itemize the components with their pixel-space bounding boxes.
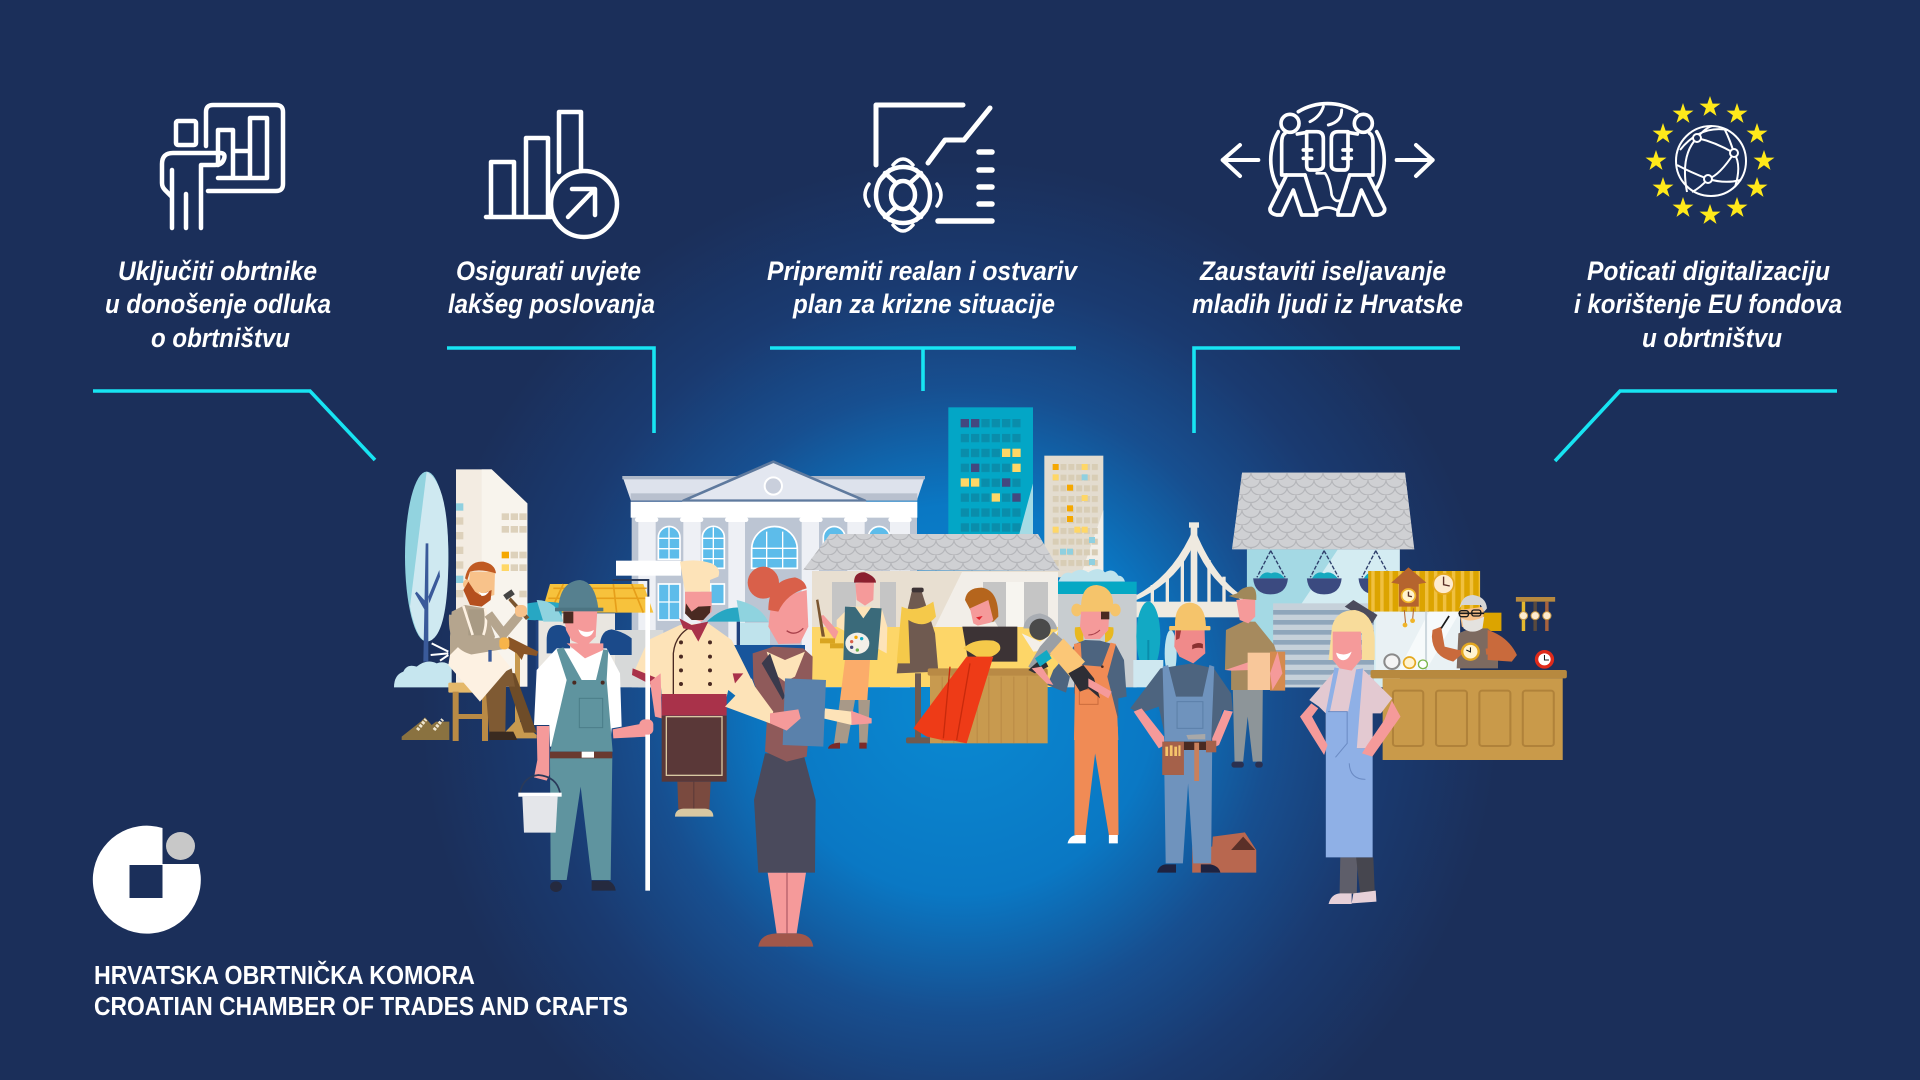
- figure: carpenter with tool belt: [1130, 603, 1256, 873]
- teal and beige towers, bridge: [948, 407, 1243, 687]
- text: goal 2: Osigurati uvjete: [456, 256, 641, 286]
- seamstress table and mannequin: [897, 588, 1048, 743]
- icon: growth bars with arrow: [486, 112, 617, 237]
- connector line 2: [447, 348, 654, 433]
- figure: worker legs in orange overalls: [1068, 727, 1119, 843]
- shop with scalloped roof: [803, 534, 1060, 687]
- text: goal 4: mladih ljudi iz Hrvatske: [1192, 289, 1463, 319]
- figure: painter: [816, 572, 887, 749]
- market stall building: [1232, 473, 1414, 687]
- text: goal 2: lakšeg poslovanja: [448, 289, 655, 319]
- icon: crisis plan lifebuoy: [865, 105, 992, 231]
- connector line 5: [1555, 391, 1837, 461]
- clock shop counter with watchmaker: [1368, 567, 1567, 760]
- text: goal 4: Zaustaviti iseljavanje: [1199, 256, 1446, 286]
- figure: woman in blue apron: [1300, 600, 1401, 904]
- text: goal 1: u donošenje odluka: [105, 289, 331, 319]
- organisation name: CROATIAN CHAMBER OF TRADES AND CRAFTS: [94, 993, 628, 1021]
- connector line 1: [93, 391, 375, 460]
- classical building with pediment: [497, 462, 925, 687]
- figure: laborer with roller and bucket: [518, 580, 653, 892]
- text: goal 5: i korištenje EU fondova: [1574, 289, 1842, 319]
- illustration: city skyline and tradespeople: [394, 407, 1567, 947]
- market roof scale pattern: [1232, 473, 1414, 549]
- text: goal 5: u obrtništvu: [1642, 323, 1782, 353]
- figure: delivery man with box: [1225, 587, 1285, 768]
- organisation name: HRVATSKA OBRTNIČKA KOMORA: [94, 960, 474, 990]
- text: goal 3: plan za krizne situacije: [792, 289, 1055, 319]
- connector line 4: [1194, 348, 1460, 433]
- left tree and residential tower: [394, 469, 527, 687]
- figure: businesswoman: [725, 567, 872, 947]
- logo: [93, 826, 201, 934]
- text: goal 1: o obrtništvu: [151, 323, 290, 353]
- figure: chef: [632, 560, 752, 817]
- figure: shoemaker: [402, 562, 538, 741]
- text: goal 5: Poticati digitalizaciju: [1587, 256, 1830, 286]
- icon: presenter with chart: [162, 105, 283, 228]
- icon: people leaving with arrows: [1223, 104, 1433, 215]
- text: goal 3: Pripremiti realan i ostvariv: [767, 256, 1079, 286]
- icon: EU stars and network globe: [1646, 96, 1774, 224]
- text: goal 1: Uključiti obrtnike: [118, 256, 317, 286]
- connector line 3: [770, 348, 1076, 391]
- figure: worker upper body with grinder: [1022, 585, 1127, 740]
